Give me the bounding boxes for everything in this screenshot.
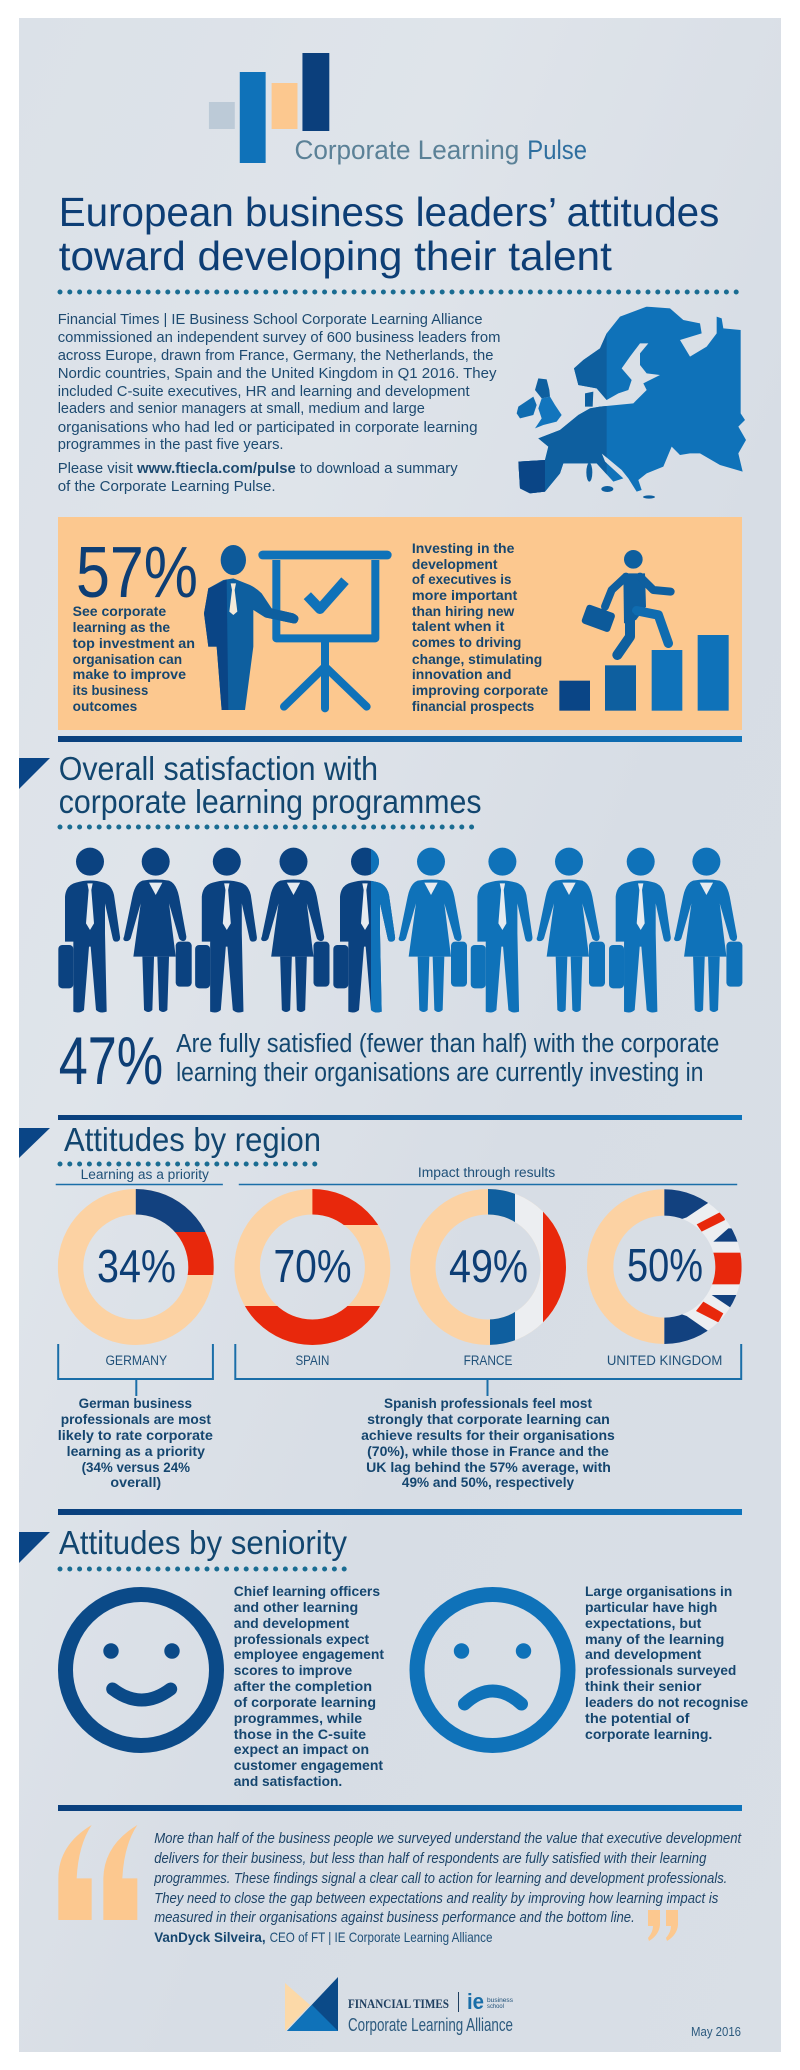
- text: chief learning officers: of corporate learning: [234, 1695, 376, 1710]
- text: Spanish professionals: UK lag behind the 57% average, with: [366, 1460, 611, 1475]
- intro text: organisations who had led or participated in corporate learning: [58, 419, 478, 436]
- donut: United Kingdom 50%: [587, 1189, 742, 1344]
- text: large organisations: Large organisations in: [585, 1584, 732, 1599]
- quote text: VanDyck Silveira,: [154, 1930, 266, 1945]
- text: chief learning officers: [234, 1584, 385, 1789]
- text: investment: [73, 604, 195, 714]
- intro text: of the Corporate Learning Pulse.: [58, 478, 276, 495]
- text: chief learning officers: scores to improve: [234, 1663, 353, 1678]
- text: German professionals: [58, 1396, 213, 1490]
- statistic: 47%: Are fully satisfied (fewer than half) with the corporate: [176, 1030, 719, 1058]
- text: large organisations: [585, 1584, 749, 1742]
- statistic: 47%: [59, 1024, 719, 1099]
- text: chief learning officers: and satisfaction.: [234, 1774, 342, 1789]
- value: 34%: [97, 1240, 176, 1292]
- text: large organisations: corporate learning.: [585, 1727, 712, 1742]
- value: 49%: [449, 1240, 528, 1292]
- bracket: Germany: GERMANY: [105, 1352, 167, 1368]
- text: investing in executives: development: [412, 557, 498, 572]
- quote text: [153, 1830, 742, 1945]
- bracket: results countries: SPAIN: [295, 1352, 329, 1368]
- donut: Germany 34%: [56, 1187, 216, 1347]
- text: investing in executives: talent when it: [412, 619, 505, 634]
- intro text: across Europe, drawn from France, Germany, the Netherlands, the: [58, 347, 493, 364]
- statistic: 47%: 47%: [59, 1024, 163, 1099]
- text: investment: its business: [73, 683, 148, 698]
- text: chief learning officers: programmes, while: [234, 1711, 363, 1726]
- text: Spanish professionals: (70%), while those in France and the: [367, 1444, 609, 1459]
- quote text: programmes. These findings signal a clear call to action for learning and development professionals.: [153, 1870, 727, 1887]
- text: large organisations: the potential of: [585, 1711, 690, 1726]
- text: German professionals: likely to rate corporate: [58, 1428, 213, 1443]
- heading: overall satisfaction: corporate learning programmes: [59, 783, 482, 820]
- text: Spanish professionals: [361, 1396, 615, 1490]
- icon: closing quotation mark: [648, 1910, 678, 1941]
- intro text: Financial Times | IE Business School Corporate Learning Alliance: [58, 311, 483, 328]
- logo: Corporate Learning Pulse: [209, 53, 587, 165]
- value: 70%: [274, 1240, 352, 1292]
- text: German professionals: professionals are most: [61, 1412, 211, 1427]
- value: 50%: [627, 1239, 703, 1291]
- logo: Corporate Learning Alliance: business: [487, 1998, 513, 2004]
- text: German professionals: overall): [110, 1475, 161, 1490]
- statistic: 57%: 57%: [76, 533, 198, 613]
- text: Spanish professionals: achieve results for their organisations: [361, 1428, 615, 1443]
- icon: opening quotation mark: [58, 1825, 137, 1920]
- quote text: delivers for their business, but less than half of respondents are fully satisfied with their learning: [154, 1850, 707, 1867]
- section marker: satisfaction: [19, 758, 50, 789]
- intro text: Please visit www.ftiecla.com/pulse to download a summary: [58, 460, 458, 477]
- icon: sad face: [417, 1594, 568, 1746]
- logo: Corporate Learning Pulse: Pulse: [527, 135, 587, 165]
- title: European business leaders’ attitudes: [59, 189, 719, 235]
- text: chief learning officers: professionals expect: [234, 1632, 370, 1647]
- intro text: leaders and senior managers at small, medium and large: [58, 400, 425, 417]
- text: chief learning officers: customer engagement: [234, 1758, 384, 1773]
- text: large organisations: leaders do not recognise: [585, 1695, 749, 1710]
- pictogram: ten people: [58, 848, 742, 1013]
- heading: overall satisfaction: [59, 750, 482, 820]
- text: chief learning officers: employee engagement: [234, 1647, 385, 1662]
- text: chief learning officers: and other learning: [234, 1600, 358, 1615]
- intro text: [58, 311, 500, 495]
- logo: Corporate Learning Alliance: FINANCIAL TIMES: [348, 1997, 449, 2011]
- bracket: results countries: FRANCE: [464, 1352, 512, 1368]
- bracket: results countries: UNITED KINGDOM: [607, 1352, 722, 1368]
- quote text: measured in their organisations against business performance and the bottom line.: [154, 1909, 635, 1926]
- text: large organisations: and development: [585, 1647, 702, 1662]
- logo: Corporate Learning Alliance: Corporate Learning Alliance: [348, 2015, 513, 2035]
- quote text: CEO of FT | IE Corporate Learning Alliance: [270, 1930, 492, 1945]
- text: chief learning officers: expect an impact on: [234, 1742, 369, 1757]
- text: Spanish professionals: Spanish professionals feel most: [384, 1396, 592, 1411]
- text: investing in executives: improving corporate: [412, 683, 549, 698]
- icon: figure climbing bars: [559, 550, 729, 711]
- text: chief learning officers: Chief learning officers: [234, 1584, 380, 1599]
- logo: Corporate Learning Alliance: [285, 1977, 513, 2035]
- text: investment: organisation can: [73, 652, 182, 667]
- text: investing in executives: change, stimulating: [412, 652, 542, 667]
- bracket: Germany: [58, 1344, 213, 1396]
- title: toward developing their talent: [59, 233, 613, 279]
- donut: France 49%: [408, 1187, 568, 1347]
- intro text: commissioned an independent survey of 600 business leaders from: [58, 329, 500, 346]
- text: investing in executives: [412, 541, 549, 714]
- text: investing in executives: comes to driving: [412, 635, 521, 650]
- text: investing in executives: more important: [412, 588, 518, 603]
- text: investing in executives: financial prospects: [412, 699, 534, 714]
- text: large organisations: particular have high: [585, 1600, 717, 1615]
- text: investment: learning as the: [73, 620, 171, 635]
- section marker: seniority: [19, 1532, 50, 1563]
- date: May 2016: [691, 2024, 741, 2039]
- logo: Corporate Learning Alliance: ie: [467, 1989, 484, 2014]
- text: large organisations: many of the learning: [585, 1632, 724, 1647]
- donut: Spain 70%: [232, 1187, 392, 1347]
- logo: Corporate Learning Alliance: school: [487, 2004, 504, 2010]
- text: large organisations: professionals surveyed: [585, 1663, 736, 1678]
- text: German professionals: learning as a priority: [67, 1444, 205, 1459]
- heading: attitudes by seniority: Attitudes by seniority: [59, 1524, 347, 1561]
- text: Spanish professionals: 49% and 50%, respectively: [402, 1475, 575, 1490]
- text: chief learning officers: after the completion: [234, 1679, 372, 1694]
- text: investing in executives: Investing in the: [412, 541, 515, 556]
- title: [59, 189, 719, 279]
- map of Europe: [516, 306, 746, 499]
- statistic: 47%: learning their organisations are currently investing in: [176, 1059, 703, 1087]
- logo: Corporate Learning Pulse: Corporate Learning: [294, 135, 519, 165]
- intro text: programmes in the past five years.: [58, 436, 284, 453]
- text: investing in executives: than hiring new: [412, 604, 515, 619]
- text: investment: make to improve: [73, 667, 187, 682]
- text: large organisations: expectations, but: [585, 1616, 702, 1631]
- label: learning as a priority: Learning as a priority: [81, 1166, 209, 1182]
- text: investment: See corporate: [73, 604, 167, 619]
- text: large organisations: think their senior: [585, 1679, 702, 1694]
- text: investment: top investment an: [73, 636, 195, 651]
- text: investment: outcomes: [73, 699, 137, 714]
- icon: happy face: [66, 1594, 216, 1746]
- heading: overall satisfaction: Overall satisfaction with: [59, 750, 378, 787]
- text: chief learning officers: those in the C-suite: [234, 1727, 367, 1742]
- label: impact through results: Impact through results: [418, 1164, 555, 1180]
- text: Spanish professionals: strongly that corporate learning can: [367, 1412, 610, 1427]
- text: German professionals: German business: [79, 1396, 192, 1411]
- bracket: results countries: [235, 1344, 741, 1396]
- intro text: included C-suite executives, HR and learning and development: [58, 383, 470, 400]
- text: investing in executives: of executives is: [412, 572, 511, 587]
- heading: attitudes by region: Attitudes by region: [64, 1121, 321, 1158]
- intro text: Nordic countries, Spain and the United Kingdom in Q1 2016. They: [58, 365, 497, 382]
- icon: presenter with board: [204, 545, 387, 710]
- quote text: They need to close the gap between expectations and reality by improving how learning impact is: [154, 1890, 719, 1907]
- panel: 57 percent: [58, 517, 742, 730]
- section marker: region: [19, 1128, 50, 1158]
- text: investing in executives: innovation and: [412, 667, 511, 682]
- text: German professionals: (34% versus 24%: [82, 1460, 190, 1475]
- text: chief learning officers: and development: [234, 1616, 350, 1631]
